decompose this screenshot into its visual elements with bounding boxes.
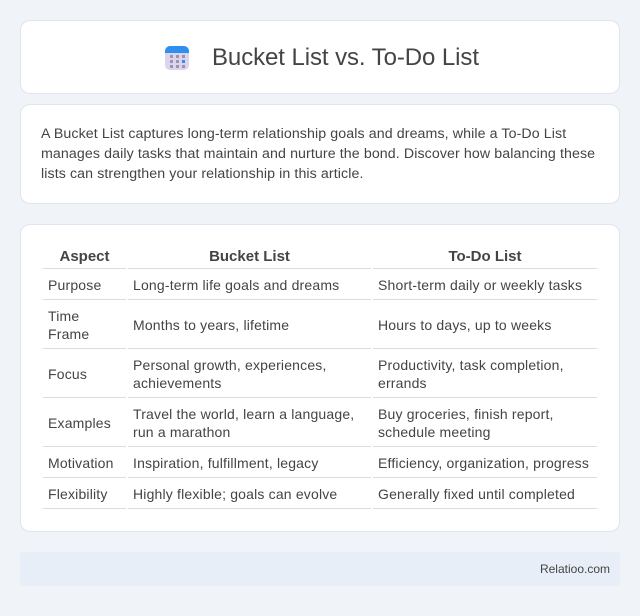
comparison table: schedule meeting (378, 424, 491, 440)
comparison table: Inspiration, fulfillment, legacy (133, 455, 319, 471)
comparison table: Highly flexible; goals can evolve (133, 486, 337, 502)
comparison table: errands (378, 375, 427, 391)
row: Examples: Examples (48, 415, 111, 431)
comparison table: run a marathon (133, 424, 230, 440)
column header: To-Do List: To-Do List (448, 248, 522, 265)
comparison table: Hours to days, up to weeks (378, 317, 552, 333)
intro text: lists can strengthen your relationship in this article. (41, 166, 364, 182)
comparison table: Travel the world, learn a language, (133, 406, 354, 422)
row: Time Frame: Frame (48, 326, 89, 342)
row: Motivation: Motivation (48, 455, 114, 471)
intro text: manages daily tasks that maintain and nurture the bond. Discover how balancing these (41, 146, 595, 162)
comparison table: Personal growth, experiences, (133, 357, 327, 373)
comparison table: Months to years, lifetime (133, 317, 289, 333)
intro text: A Bucket List captures long-term relationship goals and dreams, while a To-Do List (41, 126, 566, 142)
comparison table: Generally fixed until completed (378, 486, 575, 502)
header panel (20, 20, 620, 94)
comparison table: Short-term daily or weekly tasks (378, 277, 582, 293)
row: Purpose: Purpose (48, 277, 101, 293)
comparison table: Buy groceries, finish report, (378, 406, 554, 422)
row: Focus: Focus (48, 366, 87, 382)
row: Time Frame: Time (48, 308, 79, 324)
row: Flexibility: Flexibility (48, 486, 108, 502)
intro text (41, 126, 595, 182)
comparison table: Productivity, task completion, (378, 357, 564, 373)
icon: calendar (165, 46, 189, 70)
title: Bucket List vs. To-Do List (212, 44, 479, 71)
intro panel (20, 104, 620, 204)
comparison table: Long-term life goals and dreams (133, 277, 339, 293)
footer text: Relatioo.com: Relatioo.com (540, 562, 610, 576)
comparison table: Efficiency, organization, progress (378, 455, 589, 471)
comparison table panel (20, 224, 620, 532)
column header: Aspect: Aspect (59, 248, 110, 265)
row: Time Frame (48, 308, 89, 342)
column header: Bucket List: Bucket List (209, 248, 290, 265)
footer bar (20, 552, 620, 586)
comparison table: achievements (133, 375, 222, 391)
